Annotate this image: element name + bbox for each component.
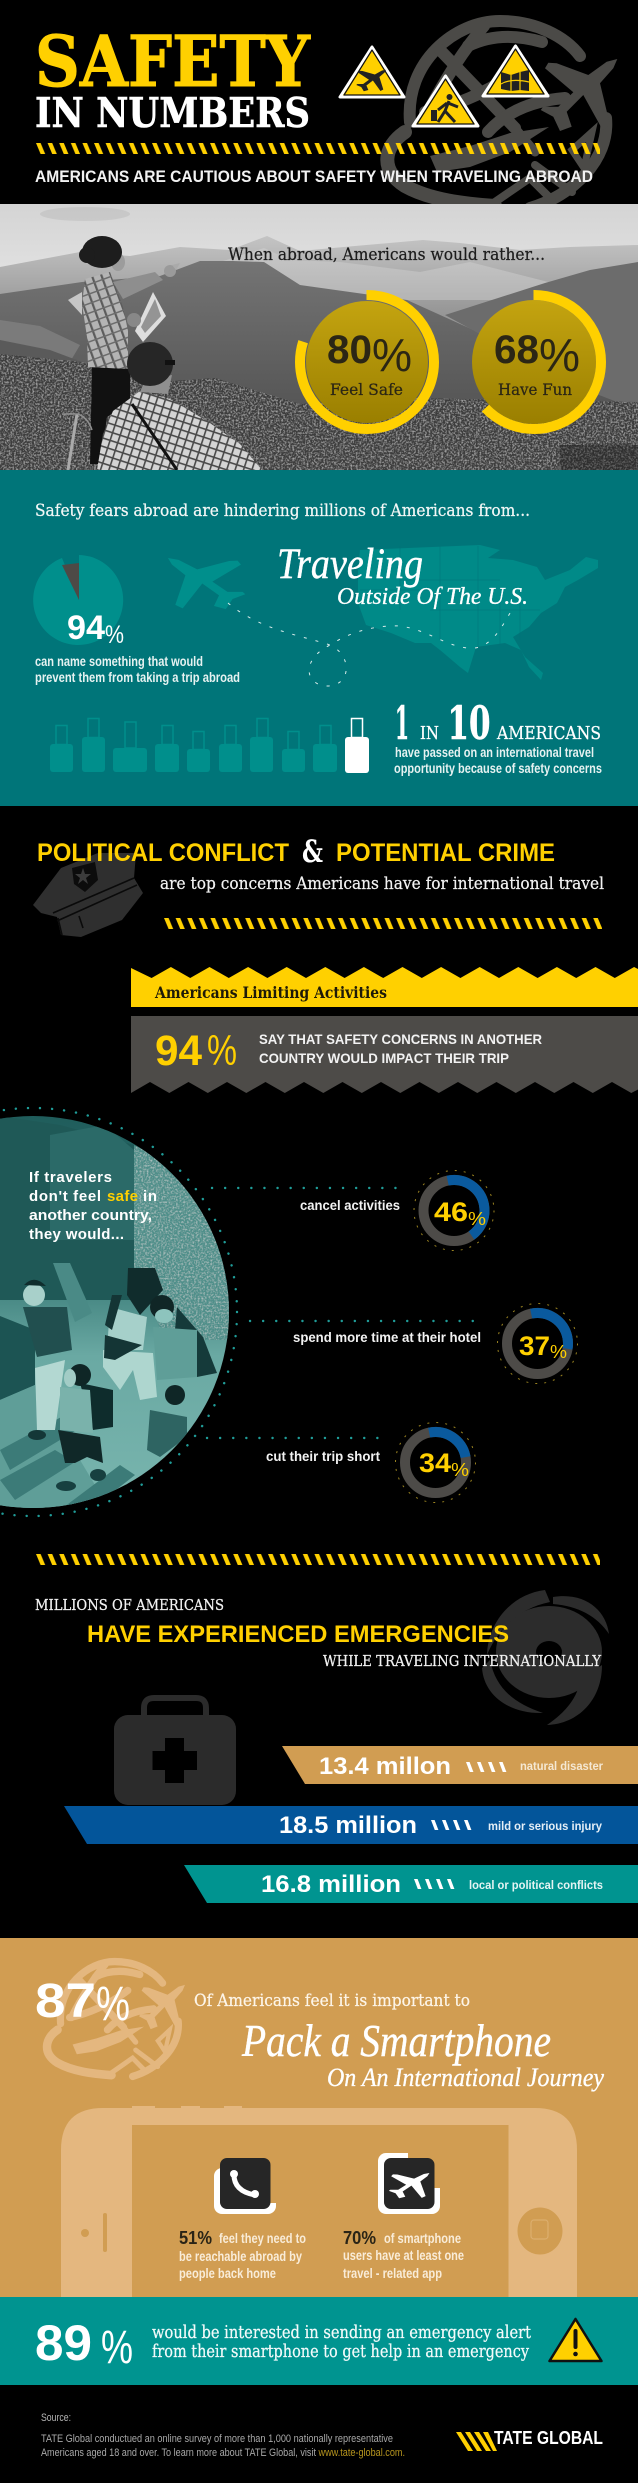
icon: plane app [378, 2150, 442, 2214]
chart: 68 percent have fun: 68 [494, 328, 539, 372]
dotted ring [0, 1108, 237, 1516]
text: source note: www.tate-global.com. [318, 2447, 405, 2459]
heading: traveling: Traveling [277, 541, 423, 588]
map: state lines [360, 546, 540, 648]
text: if travelers: they would... [29, 1226, 124, 1243]
item: spend more time 37 percent: spend more time at their hotel [293, 1329, 481, 1345]
icon: map warning sign [483, 46, 548, 96]
item: cancel activities 46 percent: cancel activities [300, 1197, 400, 1213]
title: in numbers: IN NUMBERS [35, 89, 310, 137]
icon: airplane [168, 558, 245, 609]
text: of americans feel: Of Americans feel it is important to [194, 1991, 470, 2011]
heading: have experienced emergencies: HAVE EXPERIENCED EMERGENCIES [87, 1621, 509, 1648]
person: front hiker [56, 1364, 113, 1491]
divider: hazard stripes [36, 1554, 600, 1565]
heading: pack a smartphone: Pack a Smartphone [241, 2015, 551, 2066]
banner: americans limiting activities: Americans Limiting Activities [154, 983, 387, 1002]
bar: local or political conflicts [184, 1865, 638, 1903]
chart: 80 percent feel safe [300, 295, 434, 429]
text: if travelers: another country, [29, 1207, 152, 1224]
panel: teal traveling fears [0, 470, 638, 806]
heading: outside of the us: Outside Of The U.S. [337, 584, 528, 610]
panel: emergency alert [0, 2297, 638, 2385]
bar: mild or serious injury: 18.5 million [279, 1812, 417, 1839]
bar: natural disaster: natural disaster [520, 1759, 603, 1773]
text: emergency alert: would be interested in sending an emergency alert [152, 2322, 532, 2343]
icon: globe with plane [387, 21, 617, 208]
text: if travelers [29, 1169, 157, 1243]
icon: plane warning sign [340, 47, 404, 97]
banner: 94 percent impact: COUNTRY WOULD IMPACT THEIR TRIP [259, 1050, 509, 1066]
item: cut trip short 34 percent: % [451, 1460, 469, 1480]
item: cancel activities 46 percent [300, 1170, 494, 1250]
heading: millions of americans: MILLIONS OF AMERICANS [35, 1596, 224, 1614]
banner: 94 percent impact: SAY THAT SAFETY CONCERNS IN ANOTHER [259, 1031, 542, 1047]
icon: phone app [214, 2150, 276, 2214]
bar: mild or serious injury: mild or serious injury [488, 1819, 602, 1833]
figure: man seated [97, 342, 262, 470]
chart: 80 percent feel safe: Feel Safe [330, 380, 403, 399]
photo: backpackers [0, 1110, 240, 1520]
icon: police hat [33, 853, 143, 937]
divider: hazard stripes [36, 143, 600, 154]
text: emergency alert: from their smartphone to get help in an emergency [152, 2341, 530, 2362]
text: if travelers: If travelers [29, 1169, 112, 1186]
text: 51 percent reachable [179, 2228, 306, 2281]
text: 70 percent travel app: 70% [343, 2228, 376, 2248]
map: united states [358, 545, 598, 680]
icon: first aid kit [114, 1698, 236, 1805]
icon: warning triangle [550, 2319, 602, 2361]
item: cut trip short 34 percent [266, 1422, 476, 1502]
stat: 94 percent: % [105, 621, 124, 649]
divider: hazard stripes [164, 918, 602, 929]
text: can name something [35, 654, 240, 685]
heading: safety fears: Safety fears abroad are hindering millions of Americans from... [35, 501, 530, 521]
stat: 89 percent [35, 2315, 133, 2373]
stat: 89 percent: % [101, 2320, 133, 2373]
text: can name something: prevent them from taking a trip abroad [35, 670, 240, 685]
bar: mild or serious injury [64, 1806, 638, 1844]
icon: globe with plane light [47, 1962, 185, 2076]
icon row: ten suitcases [50, 718, 369, 773]
stat: 94 percent [67, 609, 124, 649]
text: 70 percent travel app: of smartphone [384, 2230, 461, 2246]
person: child hiker [147, 1385, 187, 1457]
text: source note [41, 2433, 405, 2459]
stat: 89 percent: 89 [35, 2315, 92, 2371]
stat: 1 in 10 americans: 1 [395, 696, 409, 750]
text: 70 percent travel app [343, 2228, 464, 2281]
text: passed on travel [394, 745, 602, 776]
heading: while traveling internationally: WHILE TRAVELING INTERNATIONALLY [323, 1652, 602, 1670]
panel: header [35, 15, 618, 204]
item: spend more time 37 percent [293, 1304, 578, 1384]
icon: traveler warning sign [413, 76, 478, 126]
text: passed on travel: have passed on an international travel [395, 745, 594, 760]
figure: woman pointing [68, 236, 180, 464]
dotted connector lines [207, 1188, 480, 1438]
item: cut trip short 34 percent: 34 [419, 1448, 451, 1478]
flight path dashes [228, 603, 512, 686]
banner: 94 percent impact [131, 1016, 638, 1093]
device: smartphone outline [61, 2106, 577, 2297]
text: 70 percent travel app: users have at least one [343, 2247, 464, 2263]
bar: local or political conflicts: local or political conflicts [469, 1878, 603, 1892]
panel: if travelers don't feel safe [0, 1108, 578, 1520]
chart: 68 percent have fun: Have Fun [498, 380, 572, 399]
text: if travelers: safe [107, 1188, 138, 1205]
bar: natural disaster [282, 1746, 638, 1784]
stat: 87 percent: 87 [35, 1975, 96, 2028]
text: source note: TATE Global conductued an online survey of more than 1,000 nationally representative [41, 2433, 393, 2445]
text: emergency alert [152, 2322, 532, 2362]
person: center hiker [103, 1268, 163, 1400]
text: source note: Americans aged 18 and over. To learn more about TATE Global, visit [41, 2447, 316, 2459]
bar: natural disaster: 13.4 millon [319, 1753, 451, 1780]
item: cancel activities 46 percent: % [468, 1209, 486, 1229]
photo: hikers on mountain [0, 204, 638, 470]
heading: on an international journey: On An International Journey [327, 2063, 604, 2092]
logo: tate global [456, 2428, 603, 2451]
panel: emergencies [35, 1554, 638, 1903]
heading: ampersand: & [302, 834, 323, 870]
stat: 94 percent: 94 [67, 609, 105, 647]
text: if travelers: in [143, 1188, 157, 1205]
item: cut trip short 34 percent: cut their trip short [266, 1448, 380, 1464]
panel: footer [41, 2412, 603, 2459]
person: bedroll hiker [23, 1263, 92, 1440]
chart: 68 percent have fun [467, 295, 601, 429]
stat: 1 in 10 americans [395, 696, 601, 750]
bar: local or political conflicts: 16.8 million [261, 1871, 401, 1898]
stat: 1 in 10 americans: AMERICANS [496, 724, 601, 744]
chart: 80 percent feel safe: % [372, 329, 412, 381]
text: top concerns: are top concerns Americans have for international travel [160, 874, 604, 894]
panel: pack a smartphone [0, 1938, 638, 2297]
chart: 94 percent pie [33, 555, 123, 645]
item: cancel activities 46 percent: 46 [434, 1197, 468, 1227]
text: when abroad: When abroad, Americans would rather... [228, 245, 545, 265]
text: 51 percent reachable: feel they need to [219, 2230, 306, 2246]
panel: mountain photo [0, 204, 638, 470]
stat: 1 in 10 americans: 10 [448, 696, 490, 750]
banner: americans limiting activities [131, 967, 638, 1007]
heading: potential crime: POTENTIAL CRIME [336, 839, 555, 867]
panel: political conflict [33, 834, 638, 1093]
banner: 94 percent impact: % [207, 1027, 237, 1075]
figure: ice axe [62, 414, 92, 470]
stat: 1 in 10 americans: IN [420, 724, 439, 744]
stat: 87 percent [35, 1975, 130, 2031]
subtitle: AMERICANS ARE CAUTIOUS ABOUT SAFETY WHEN TRAVELING ABROAD [35, 167, 593, 186]
chart: 80 percent feel safe: 80 [327, 328, 372, 372]
text: 51 percent reachable: be reachable abroad by [179, 2248, 302, 2264]
text: 51 percent reachable: people back home [179, 2265, 276, 2281]
text: if travelers: don't feel [29, 1188, 101, 1205]
icon: hurricane [482, 1590, 609, 1725]
text: 70 percent travel app: travel - related app [343, 2265, 442, 2281]
stat: 87 percent: % [96, 1978, 130, 2031]
title: safety: SAFETY [35, 20, 311, 103]
person: right hiker [150, 1295, 217, 1380]
chart: 68 percent have fun: % [539, 329, 580, 381]
item: spend more time 37 percent: 37 [519, 1331, 550, 1361]
item: spend more time 37 percent: % [550, 1342, 567, 1362]
text: source label: Source: [41, 2412, 71, 2424]
logo: tate global: TATE GLOBAL [494, 2428, 603, 2448]
heading: political conflict: POLITICAL CONFLICT [37, 839, 289, 867]
text: 51 percent reachable: 51% [179, 2228, 212, 2248]
text: can name something: can name something that would [35, 654, 203, 669]
banner: 94 percent impact: 94 [155, 1027, 202, 1075]
